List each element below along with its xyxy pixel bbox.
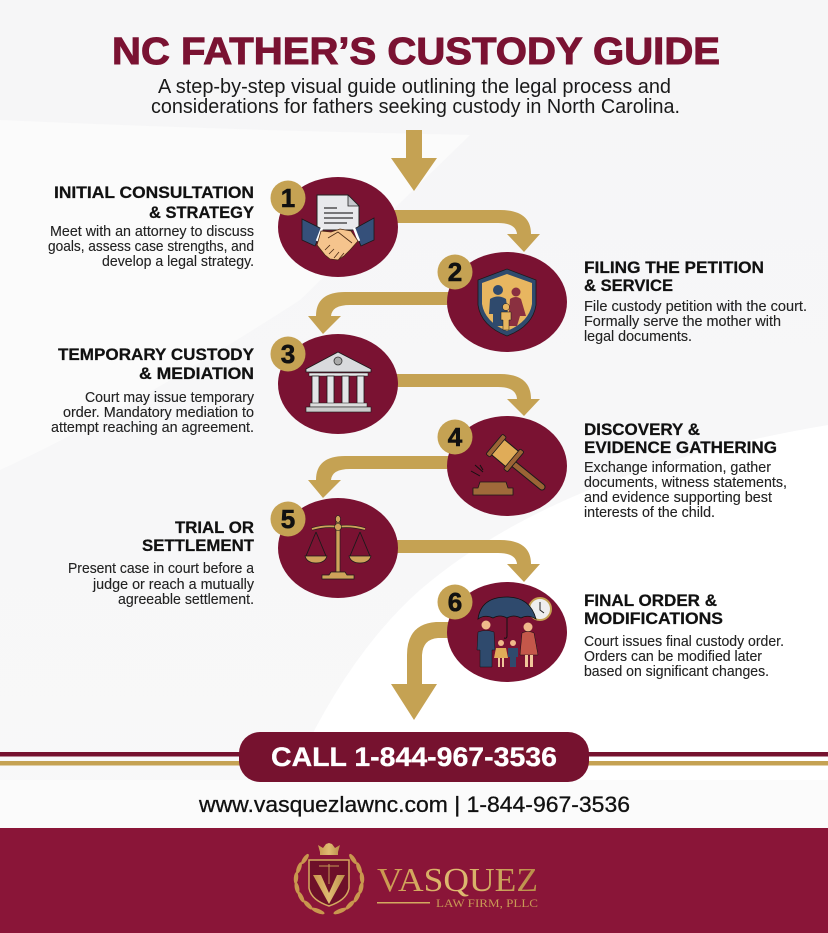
step 3 text: Court may issue temporary [85, 390, 255, 406]
step 1 circle with handshake icon [278, 177, 398, 277]
step 2 number badge: 2 [448, 257, 462, 287]
step 4 text: Exchange information, gather [584, 460, 771, 476]
step 1 text: & STRATEGY [149, 204, 254, 222]
step 6 text: FINAL ORDER & [584, 592, 717, 610]
step 4 number badge [438, 420, 472, 454]
step 6 text: Orders can be modified later [584, 649, 762, 665]
step 1 text: INITIAL CONSULTATION [54, 184, 254, 202]
step 3 text: TEMPORARY CUSTODY [58, 346, 254, 364]
step 5 text: Present case in court before a [68, 561, 255, 577]
step 6 text: Court issues final custody order. [584, 634, 784, 650]
step 2 text: Formally serve the mother with [584, 314, 781, 330]
step 5 text: agreeable settlement. [118, 592, 254, 608]
step 2 text: FILING THE PETITION [584, 259, 764, 277]
step 4 text: and evidence supporting best [584, 490, 772, 506]
logo [293, 843, 538, 916]
arrow: intro down [391, 130, 437, 191]
logo: LAW FIRM, PLLC [436, 896, 538, 910]
subtitle: A step-by-step visual guide outlining the legal process and [158, 76, 671, 98]
logo: VASQUEZ [377, 862, 538, 899]
step 3 number badge: 3 [281, 339, 295, 369]
step 6 circle with family umbrella icon [447, 582, 567, 682]
footer band [0, 828, 828, 933]
step 4 number badge: 4 [448, 422, 463, 452]
step 4 circle with gavel icon [447, 416, 567, 516]
arrow: step 6 to call [391, 622, 450, 720]
step 1 text: goals, assess case strengths, and [48, 239, 254, 255]
step 6 number badge: 6 [448, 587, 462, 617]
step 4 text [584, 421, 787, 521]
step 2 number badge [438, 254, 472, 290]
step 5 number badge: 5 [281, 504, 295, 534]
step 2 text: File custody petition with the court. [584, 299, 807, 315]
step 5 text: judge or reach a mutually [92, 577, 255, 593]
subtitle: considerations for fathers seeking custody in North Carolina. [151, 96, 680, 118]
step 3 text [51, 346, 255, 436]
step 6 text [584, 592, 784, 680]
step 3 circle with courthouse icon [278, 334, 398, 434]
website and phone: www.vasquezlawnc.com | 1-844-967-3536 [198, 792, 630, 817]
step 5 text: SETTLEMENT [142, 537, 254, 555]
step 6 text: based on significant changes. [584, 664, 769, 680]
step 5 text [68, 519, 255, 608]
step 1 text: develop a legal strategy. [102, 254, 254, 270]
arrow: step 1 to 2 [390, 210, 540, 252]
arrow: step 5 to 6 [390, 540, 540, 582]
step 6 number badge [438, 584, 472, 620]
step 4 text: DISCOVERY & [584, 421, 700, 439]
step 6 text: MODIFICATIONS [584, 610, 723, 628]
call button: CALL 1-844-967-3536 [271, 742, 557, 772]
step 3 text: & MEDIATION [139, 365, 254, 383]
step 1 number badge [270, 180, 306, 216]
step 4 text: EVIDENCE GATHERING [584, 439, 777, 457]
step 1 text: Meet with an attorney to discuss [50, 224, 254, 240]
step 4 text: documents, witness statements, [584, 475, 787, 491]
step 2 text [584, 259, 807, 345]
step 4 text: interests of the child. [584, 505, 715, 521]
step 3 text: order. Mandatory mediation to [63, 405, 254, 421]
step 5 text: TRIAL OR [175, 519, 254, 537]
step 1 number badge: 1 [281, 183, 295, 213]
arrow: step 3 to 4 [390, 374, 540, 416]
call button [239, 732, 589, 782]
title: NC FATHER’S CUSTODY GUIDE [112, 31, 720, 73]
divider stripes [0, 752, 828, 766]
step 2 text: legal documents. [584, 329, 692, 345]
step 5 number badge [270, 502, 306, 536]
arrow: step 2 to 3 [308, 292, 450, 334]
step 3 text: attempt reaching an agreement. [51, 420, 254, 436]
arrow: step 4 to 5 [308, 456, 450, 498]
step 5 circle with scales icon [278, 498, 398, 598]
step 2 circle with family shield icon [447, 252, 567, 352]
subtitle [151, 76, 680, 118]
step 2 text: & SERVICE [584, 277, 673, 295]
step 3 number badge [270, 336, 306, 372]
step 1 text [48, 184, 254, 270]
